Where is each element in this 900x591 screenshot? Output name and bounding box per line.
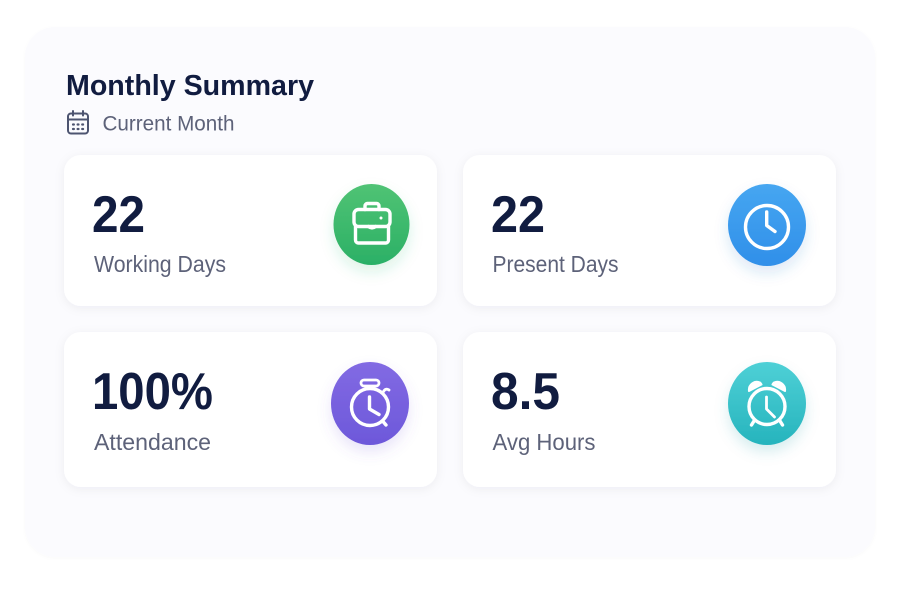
card: attendance [64,332,437,487]
value: 100% attendance: 100% [92,363,213,421]
icon: stopwatch [331,362,409,445]
card: present days [463,155,836,306]
icon: calendar [68,111,88,134]
subtitle: current month [68,111,234,136]
label: average hours: Avg Hours [492,429,596,455]
label: working days: Working Days [94,251,226,277]
icon: alarm clock [728,362,806,445]
icon: briefcase [334,184,410,265]
label: present days: Present Days [492,251,618,277]
card: average hours [463,332,836,487]
label: attendance: Attendance [94,429,211,455]
card: working days [64,155,437,306]
subtitle text: Current Month [102,112,234,136]
icon: clock [728,184,806,266]
value: 8.5 average hours: 8.5 [491,363,560,421]
value: 22 working days: 22 [92,186,145,244]
title: Monthly Summary [66,70,314,102]
value: 22 present days: 22 [491,186,545,244]
